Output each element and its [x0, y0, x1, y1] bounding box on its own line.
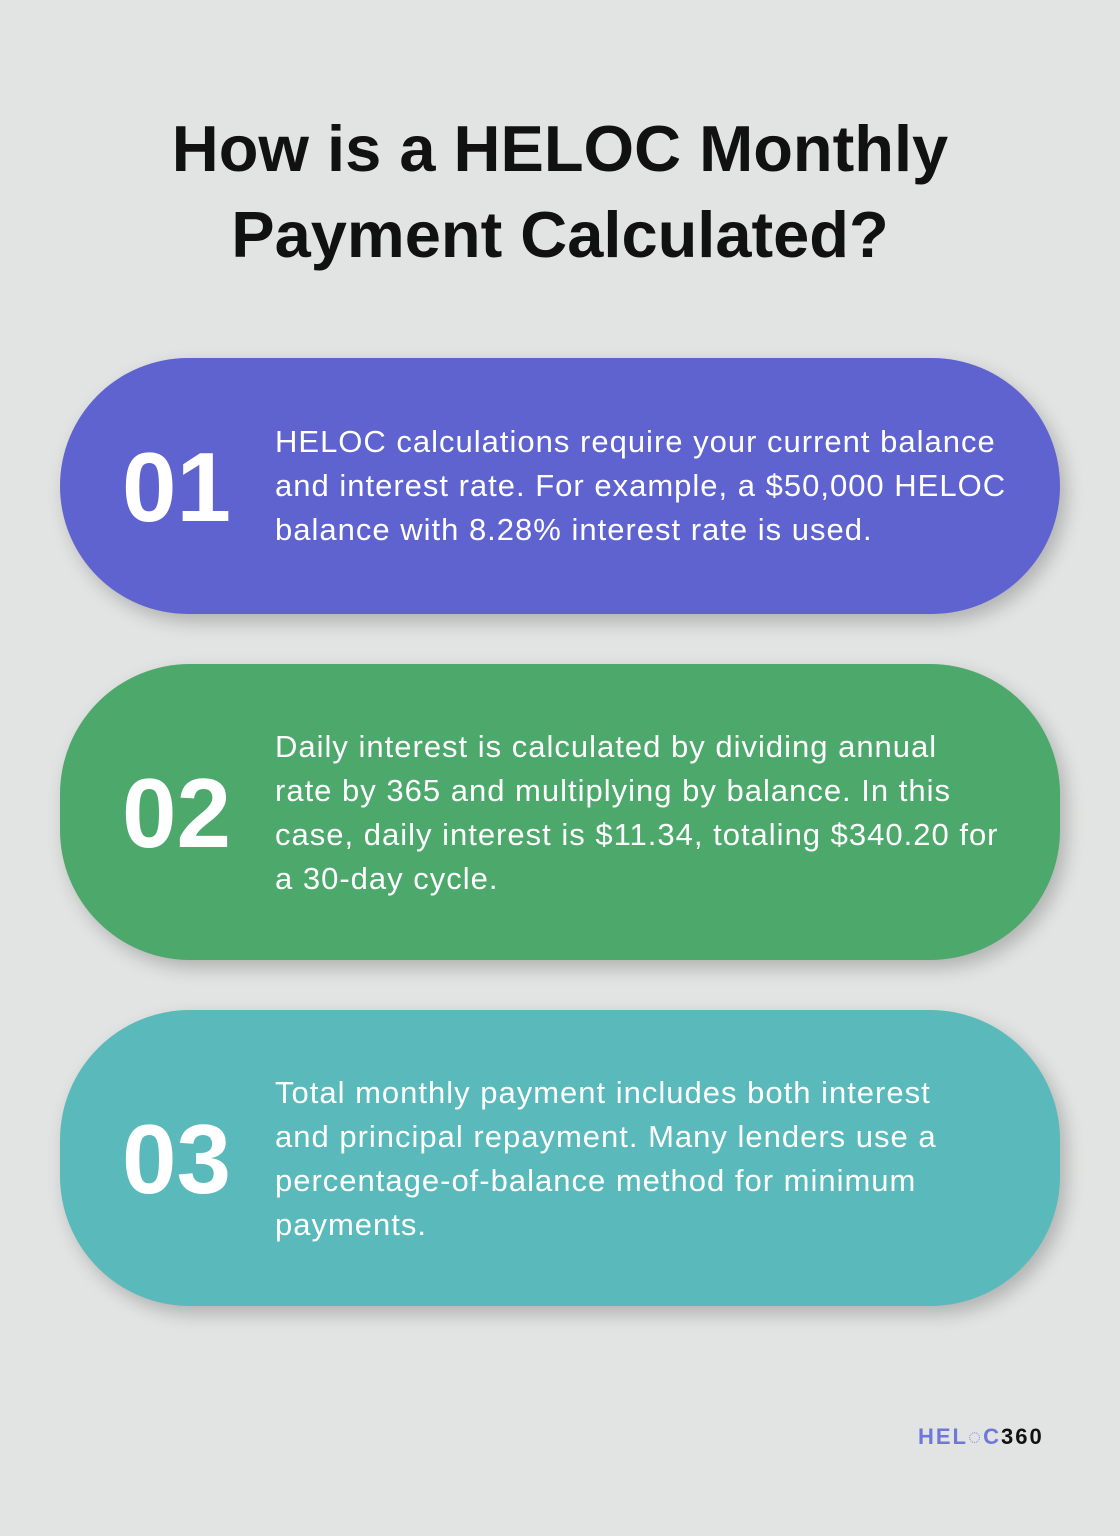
text 03: [275, 1075, 937, 1242]
title: How is a HELOC Monthly: [172, 112, 948, 185]
text 01: [275, 424, 1006, 547]
text 01: and interest rate. For example, a $50,000 HELOC: [275, 468, 1006, 503]
panel: step 02: [60, 664, 1060, 960]
text 02: a 30-day cycle.: [275, 861, 498, 896]
text 03: Total monthly payment includes both interest: [275, 1075, 931, 1110]
title: Payment Calculated?: [231, 198, 889, 271]
text 03: and principal repayment. Many lenders use a: [275, 1119, 937, 1154]
panel: step 03: [60, 1010, 1060, 1306]
number 01: 01: [122, 432, 231, 542]
text 03: payments.: [275, 1207, 427, 1242]
text 02: case, daily interest is $11.34, totaling $340.20 for: [275, 817, 999, 852]
text 02: [275, 729, 999, 896]
text 01: HELOC calculations require your current balance: [275, 424, 996, 459]
text 02: Daily interest is calculated by dividing annual: [275, 729, 937, 764]
text 01: balance with 8.28% interest rate is used.: [275, 512, 873, 547]
text 03: percentage-of-balance method for minimum: [275, 1163, 916, 1198]
number 02: 02: [122, 758, 231, 868]
logo: HEL◌C360: [918, 1424, 1044, 1449]
panel: step 01: [60, 358, 1060, 614]
number 03: 03: [122, 1104, 231, 1214]
text 02: rate by 365 and multiplying by balance. In this: [275, 773, 951, 808]
title: [172, 112, 948, 271]
